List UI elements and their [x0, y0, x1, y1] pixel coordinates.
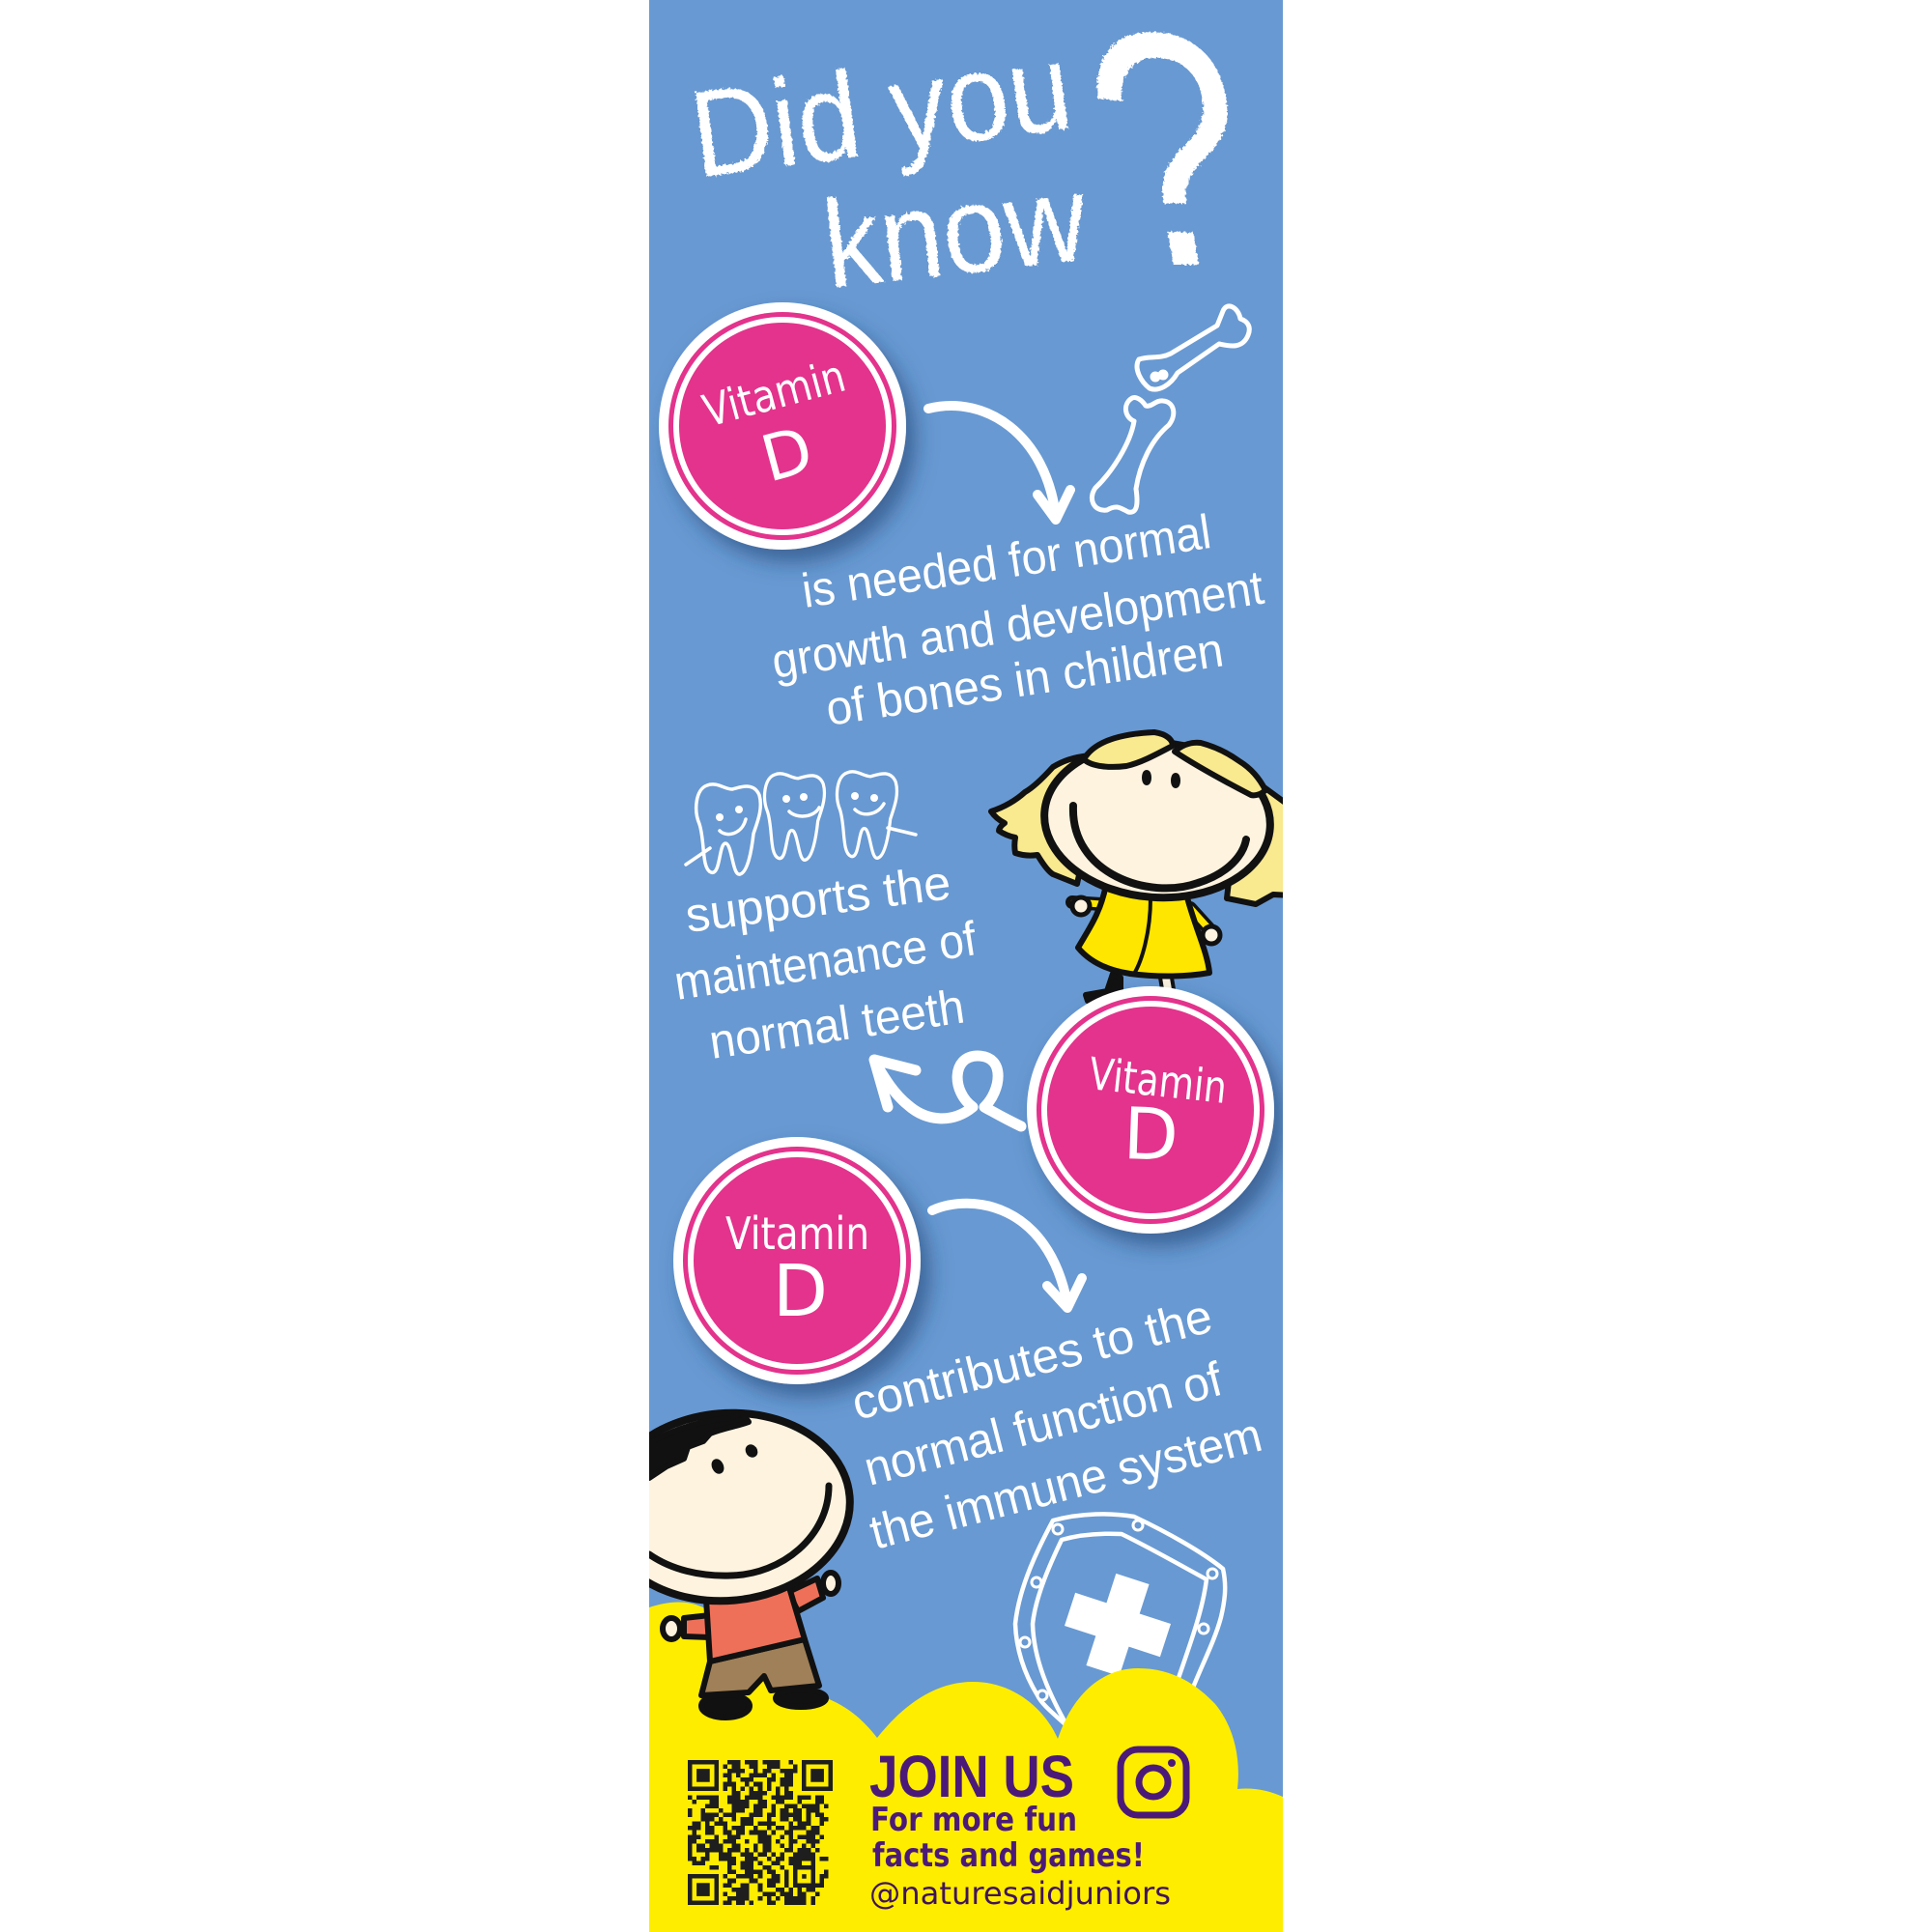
- background: yellow cloud: [649, 1603, 1283, 1932]
- callout: vitamin D badge two: D: [1122, 1093, 1179, 1178]
- text block: join us: facts and games!: [872, 1836, 1145, 1875]
- text block: join us: @naturesaidjuniors: [869, 1875, 1171, 1912]
- character: girl: [991, 732, 1294, 1001]
- callout: vitamin D badge three: Vitamin: [725, 1208, 869, 1260]
- callout: vitamin D badge three: [673, 1137, 921, 1384]
- arrow: loop to teeth text: [874, 1056, 1021, 1126]
- icon: instagram: [1121, 1749, 1186, 1815]
- QR code: [688, 1760, 833, 1905]
- text block: immune system: normal function of: [859, 1351, 1228, 1496]
- icon: shield with cross: [1015, 1514, 1225, 1731]
- text block: join us: [869, 1744, 1171, 1912]
- icon: smiling teeth: [686, 772, 916, 874]
- text block: bones: is needed for normal: [798, 504, 1214, 618]
- callout: vitamin D badge two: [1027, 986, 1274, 1234]
- character: boy: [649, 1408, 854, 1720]
- text block: join us: For more fun: [870, 1801, 1077, 1839]
- icon: bones: [1092, 306, 1249, 512]
- arrow: badge to immune text: [932, 1204, 1082, 1308]
- callout: vitamin D badge one: Vitamin: [697, 350, 851, 438]
- text block: teeth: [676, 869, 975, 1059]
- arrow: badge to bones text: [928, 406, 1070, 520]
- text block: join us: JOIN US: [869, 1744, 1074, 1809]
- text block: immune system: [855, 1308, 1262, 1548]
- callout: vitamin D badge two: Vitamin: [1087, 1047, 1230, 1114]
- text block: teeth: supports the: [682, 855, 953, 943]
- title: know: [816, 149, 1094, 315]
- callout: vitamin D badge one: D: [753, 412, 820, 497]
- text block: immune system: the immune system: [865, 1407, 1267, 1560]
- callout: vitamin D badge three: D: [773, 1250, 828, 1333]
- text block: teeth: maintenance of: [670, 911, 980, 1010]
- panel: vitamin D bookmark: [649, 0, 1283, 1932]
- title: Did you: [683, 17, 1079, 205]
- text block: bones: growth and development: [768, 560, 1267, 689]
- title: [694, 31, 1229, 288]
- text block: immune system: contributes to the: [846, 1289, 1217, 1431]
- callout: vitamin D badge one: [659, 302, 906, 550]
- text block: teeth: normal teeth: [706, 980, 968, 1069]
- text block: bones: of bones in children: [822, 622, 1227, 736]
- text block: bones: [775, 513, 1265, 724]
